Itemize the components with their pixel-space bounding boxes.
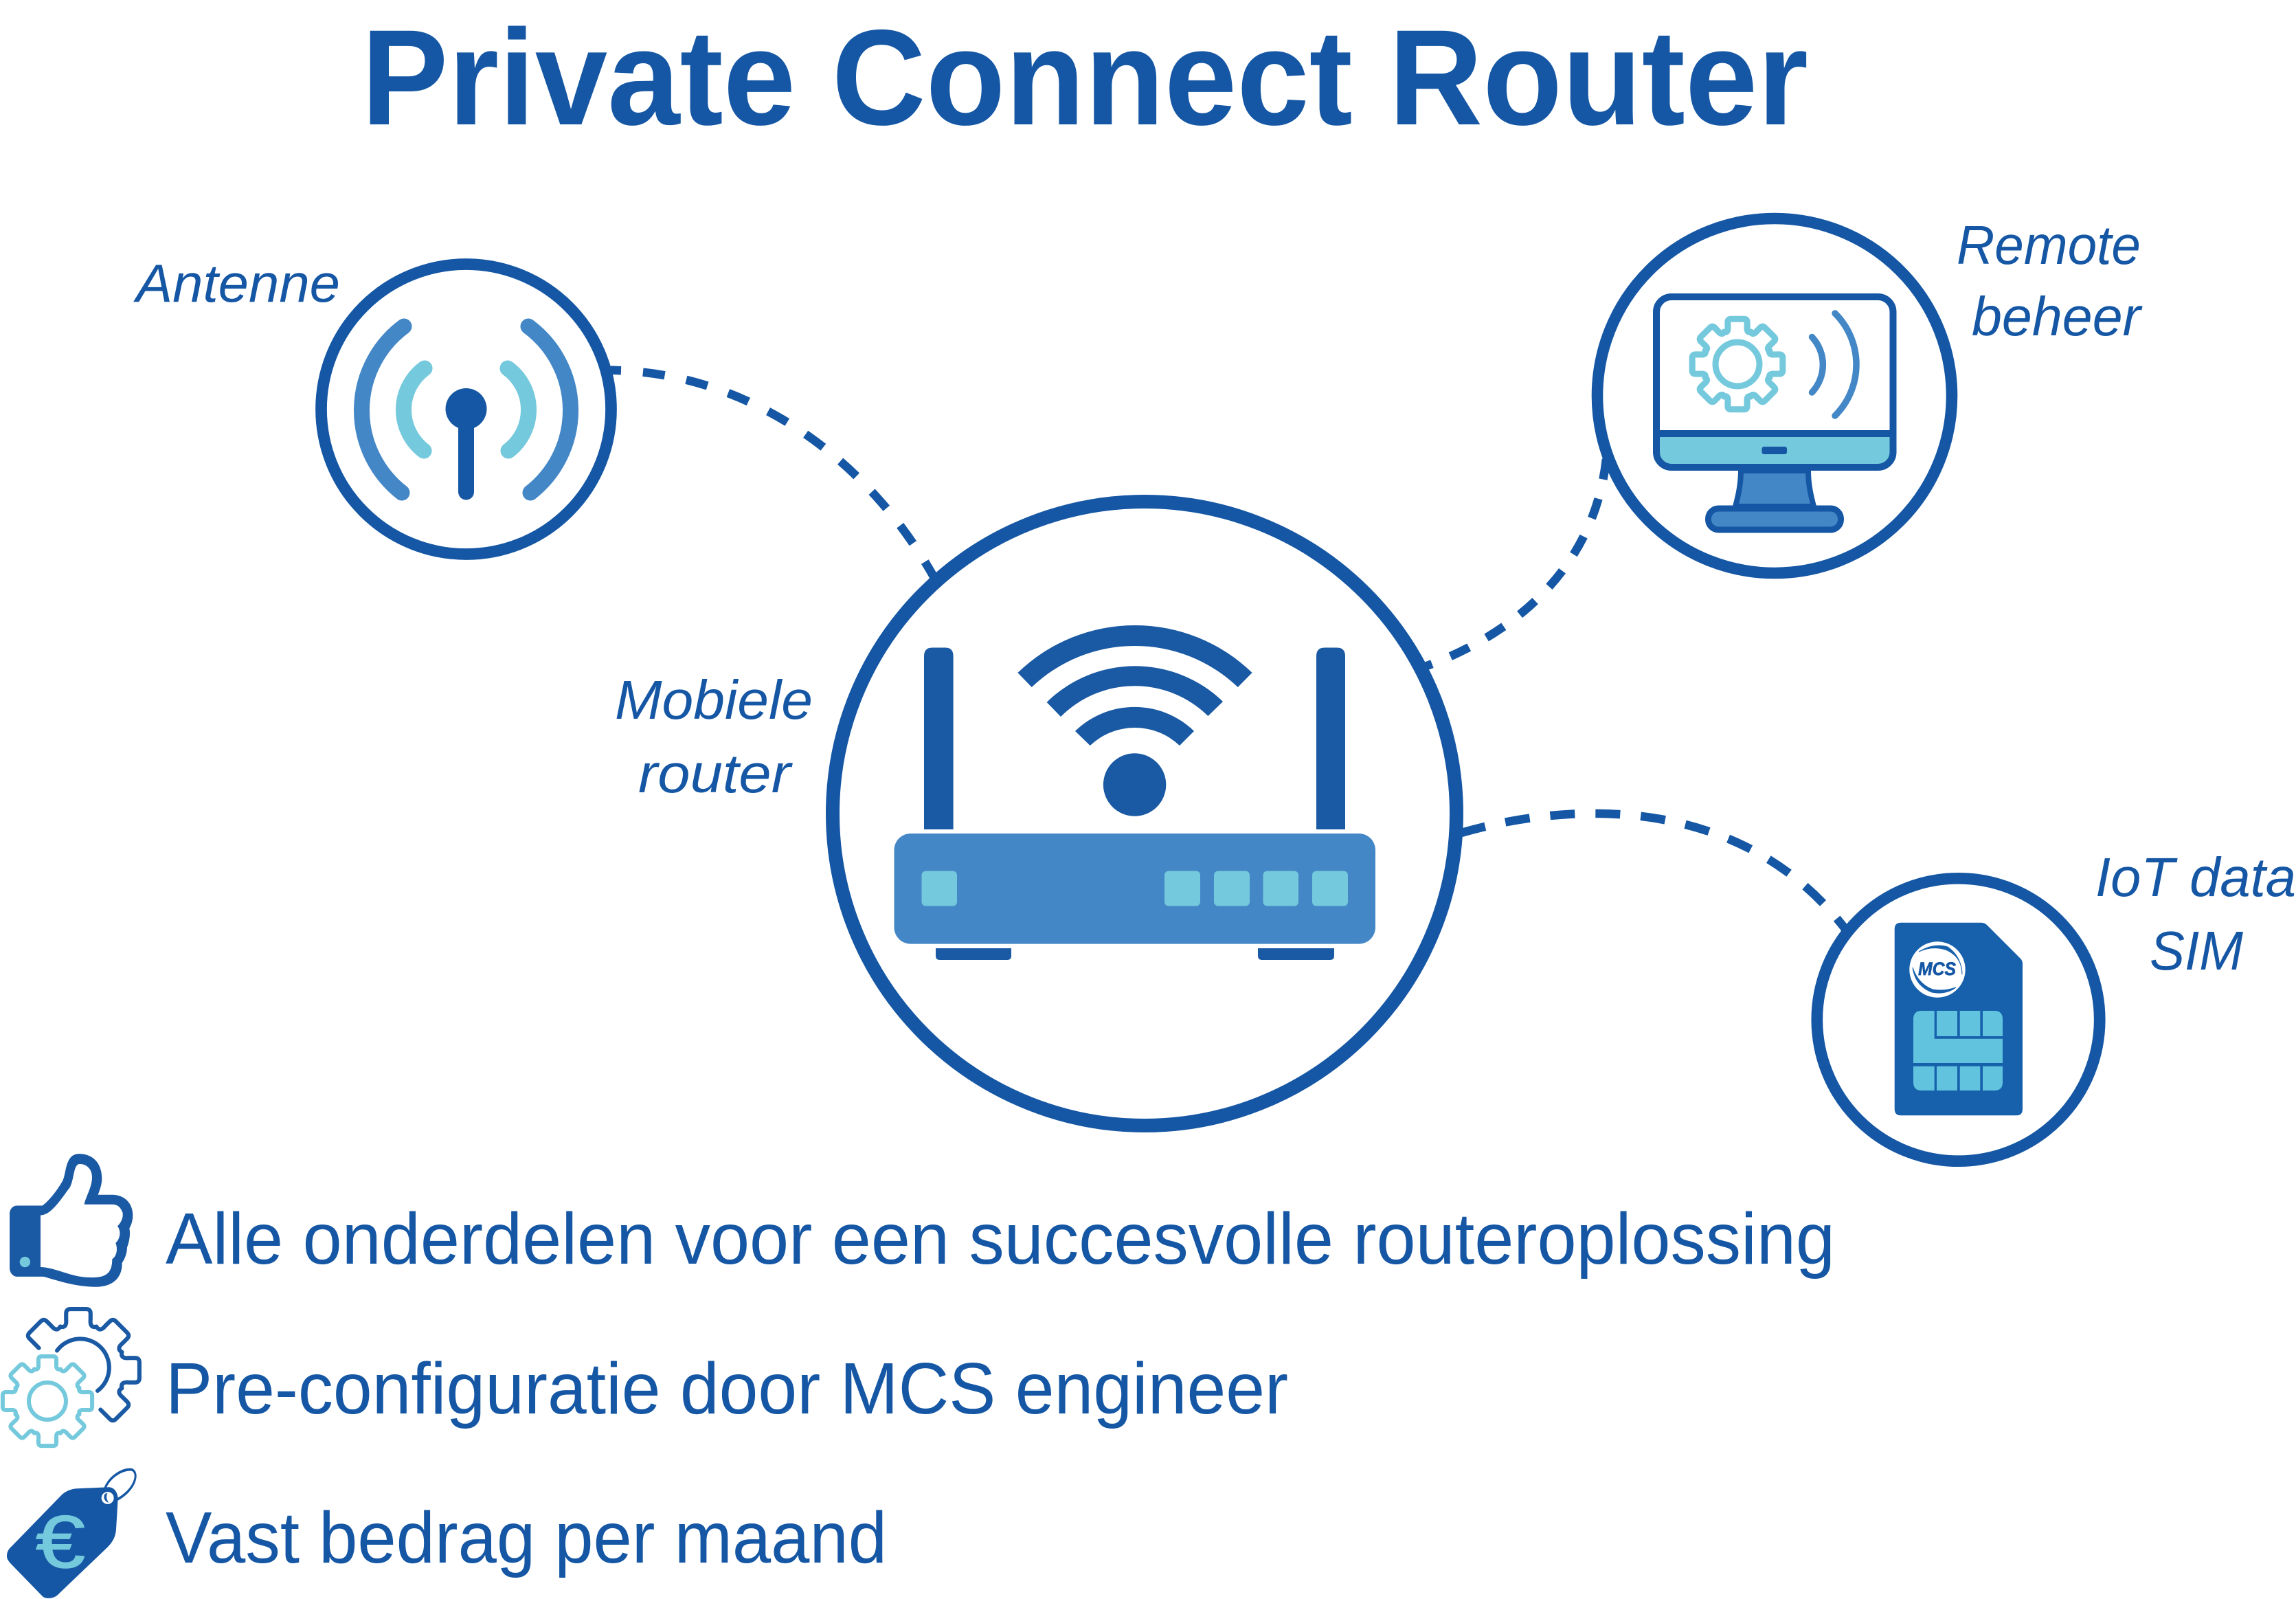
connector: router to SIM — [1461, 814, 1845, 929]
remote management circle — [1597, 219, 1952, 573]
MCS logo — [1909, 941, 1966, 998]
router circle — [833, 502, 1456, 1126]
text: fixed monthly amount: Vast bedrag per maand — [166, 1497, 887, 1578]
panel: remote management — [1597, 219, 1952, 573]
text: all parts: Alle onderdelen voor een succesvolle routeroplossing — [166, 1198, 1835, 1279]
icon: antenna — [361, 326, 571, 493]
label: IoT data SIM: IoT data — [2095, 847, 2296, 908]
label: remote management: Remote — [1957, 214, 2141, 276]
panel: antenna — [322, 264, 611, 554]
label: remote management: beheer — [1972, 286, 2143, 347]
icon: price tag — [7, 1470, 135, 1598]
label: mobile router — [615, 669, 813, 804]
connector: antenna to router — [599, 370, 938, 584]
icon: thumbs up — [10, 1154, 133, 1287]
icon: gears — [3, 1309, 139, 1446]
label: antenna: Antenne — [133, 253, 340, 313]
label: remote management — [1957, 214, 2143, 347]
antenna circle — [322, 264, 611, 554]
icon: SIM card — [1895, 923, 2023, 1115]
icon: price tag: € — [36, 1500, 85, 1583]
MCS logo: MCS — [1918, 959, 1956, 979]
panel: mobile router — [833, 502, 1456, 1126]
icon: router — [894, 625, 1375, 960]
title: Private Connect Router — [361, 1, 1808, 153]
label: IoT data SIM: SIM — [2150, 920, 2243, 981]
label: mobile router: router — [638, 743, 794, 804]
text: pre-configuration: Pre-configuratie door MCS engineer — [166, 1348, 1288, 1429]
connector: remote management to router — [1425, 459, 1606, 667]
icon: monitor — [1656, 297, 1893, 530]
label: IoT data SIM — [2095, 847, 2296, 981]
SIM circle — [1817, 878, 2100, 1161]
label: mobile router: Mobiele — [615, 669, 813, 730]
panel: IoT data SIM — [1817, 878, 2100, 1161]
